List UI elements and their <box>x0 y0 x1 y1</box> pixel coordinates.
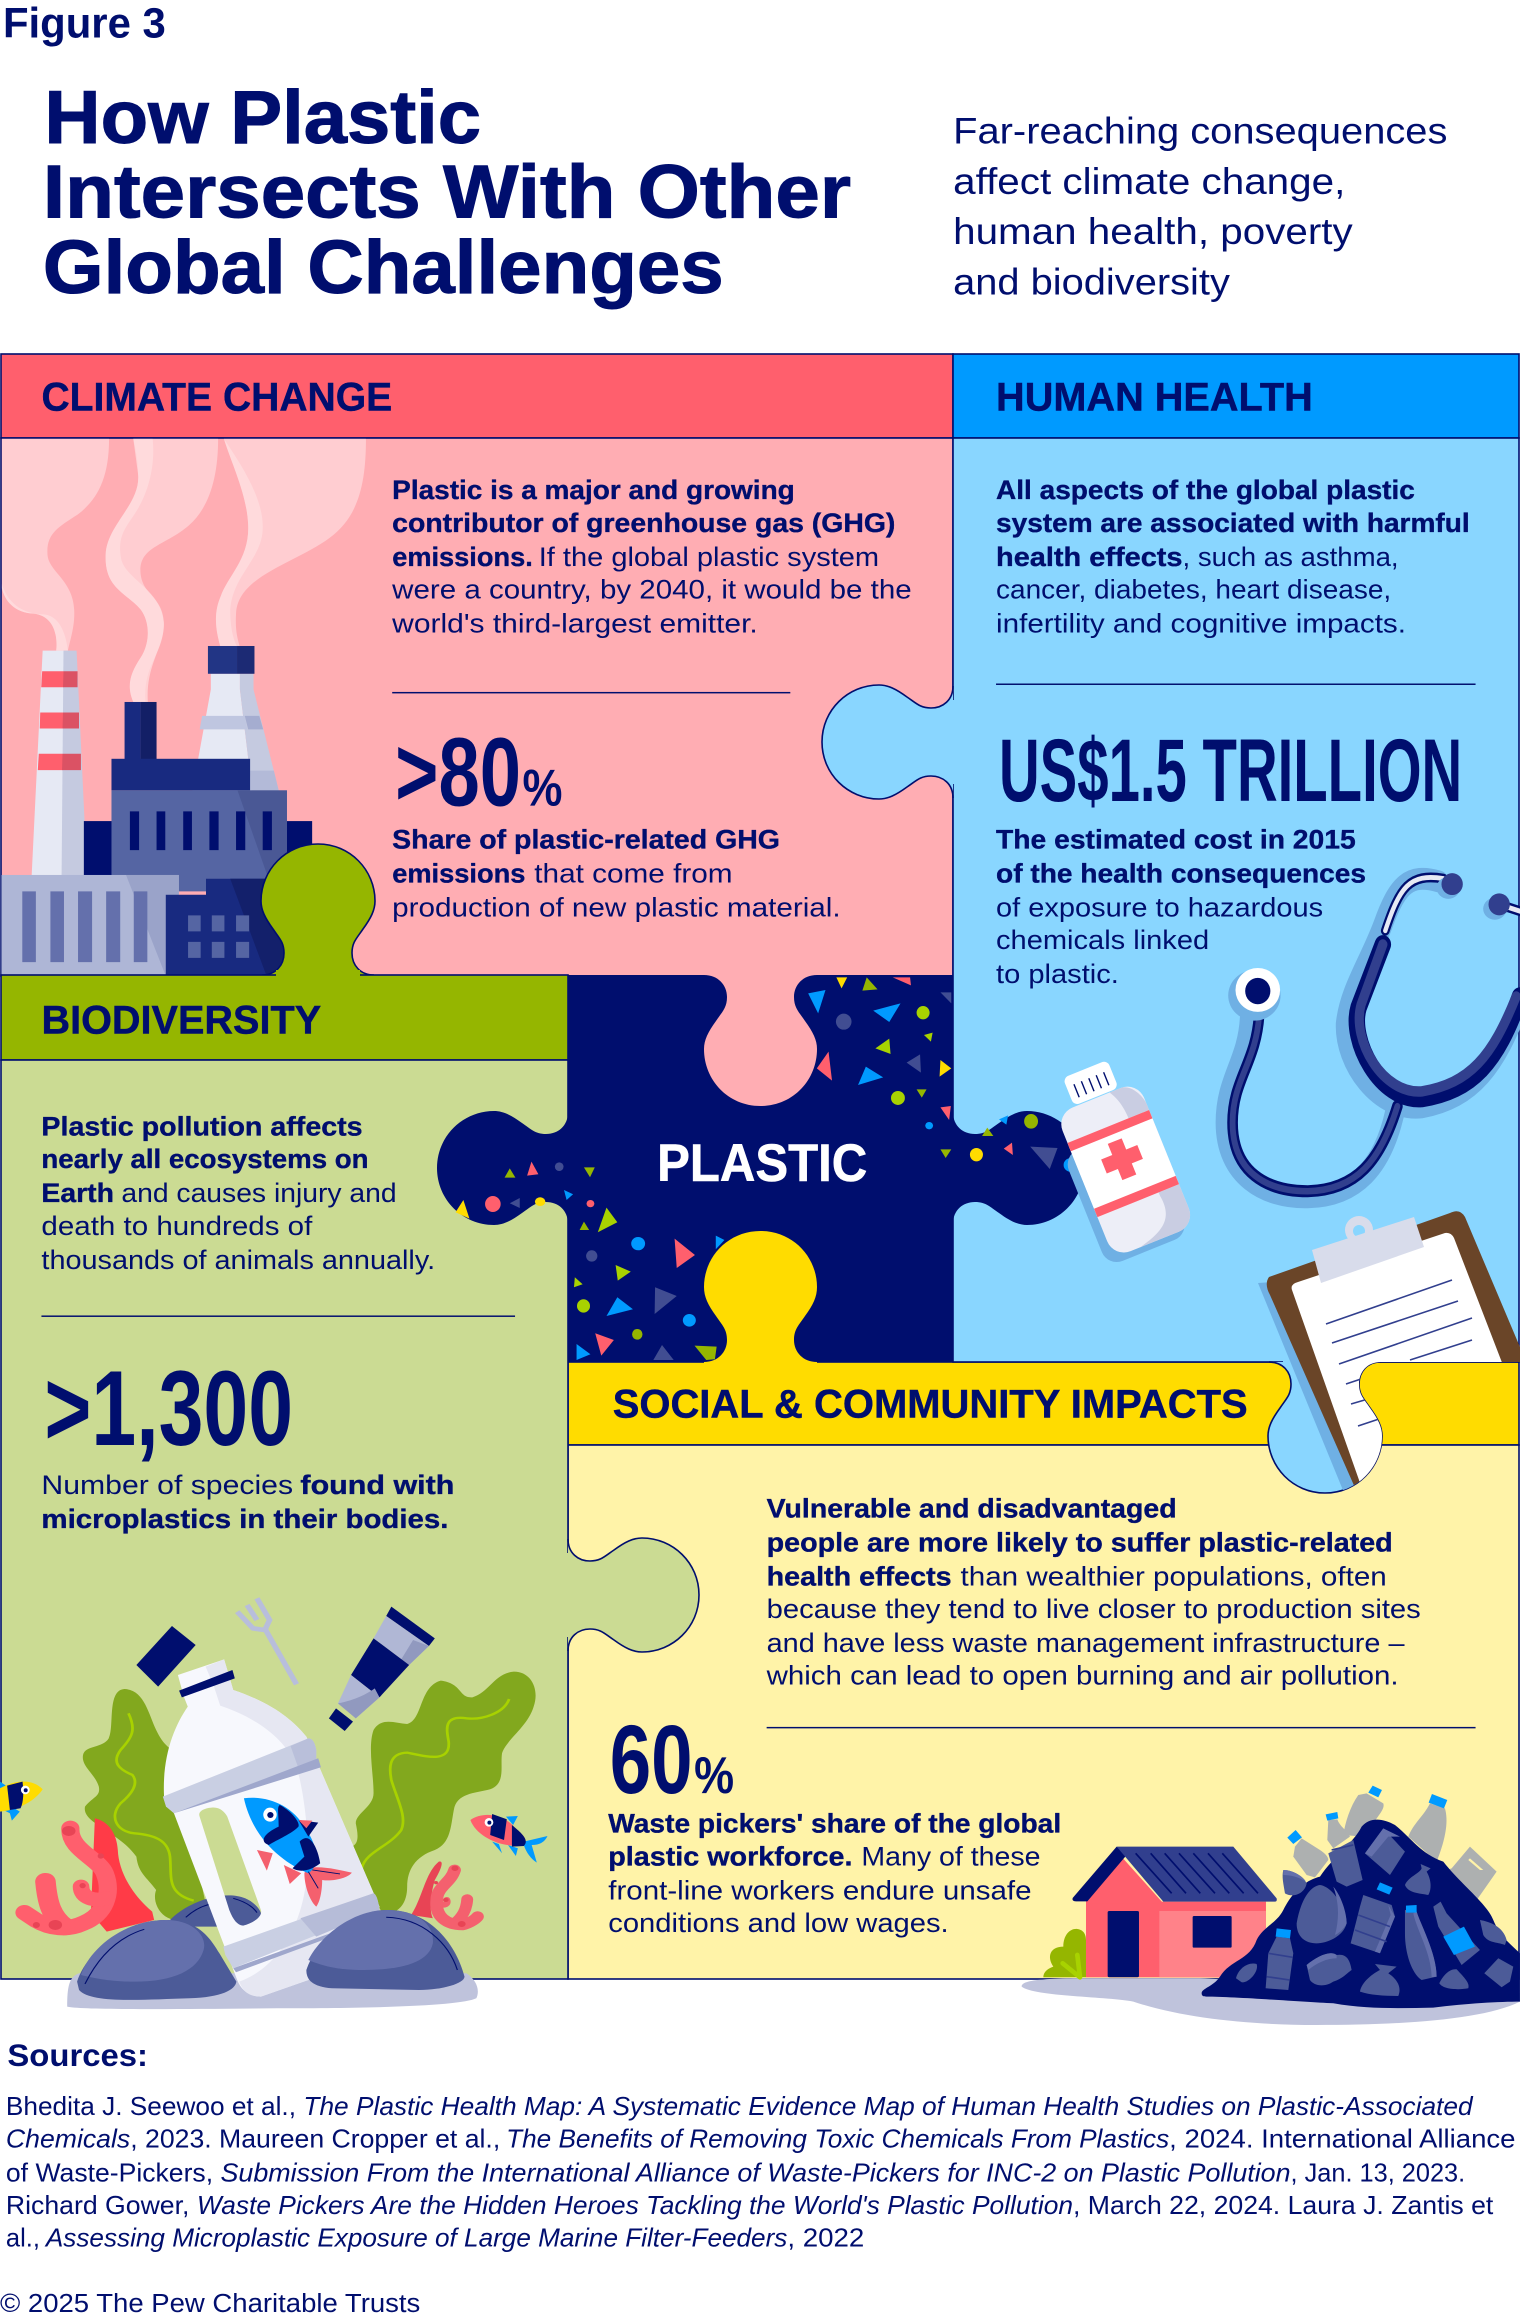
plastic bottle <box>164 1659 379 1997</box>
text: biodiversity intro: thousands of animals annually. <box>41 1244 435 1275</box>
panel: human health <box>822 354 1520 1565</box>
title: How Plastic <box>44 75 481 159</box>
text: climate intro: emissions. <box>392 541 533 572</box>
title: Global Challenges <box>43 225 724 309</box>
stat: over 80 percent <box>392 718 841 923</box>
stat: over 80 percent: >80 <box>395 718 521 827</box>
front rocks <box>77 1920 236 2000</box>
fish right <box>492 1816 547 1863</box>
title: Intersects With Other <box>43 150 851 234</box>
stat: over 80 percent: emissions <box>392 858 525 889</box>
sources: Chemicals <box>6 2125 131 2153</box>
stat: US$1.5 trillion: of the health consequences <box>996 858 1366 889</box>
stat: over 80 percent: % <box>522 759 562 817</box>
illustration: medicine bottle <box>1036 1053 1198 1267</box>
panel: climate change <box>1 354 953 976</box>
sources: Submission From the International Alliance of Waste-Pickers for INC-2 on Plastic Pollution <box>221 2160 1291 2188</box>
stat: over 1,300 species: microplastics in their bodies. <box>41 1503 448 1534</box>
stat: over 80 percent: Share of plastic-related GHG <box>392 824 780 855</box>
text: social intro: than wealthier populations, often <box>961 1561 1387 1592</box>
sources: Sources: <box>7 2038 148 2073</box>
knob: climate piece into plastic <box>704 973 817 1106</box>
gray bottles on top of the pile <box>1293 1793 1497 1906</box>
text: biodiversity intro: Plastic pollution affects <box>41 1111 363 1142</box>
stat: US$1.5 trillion: of exposure to hazardous <box>996 892 1323 923</box>
stat: 60 percent: Waste pickers' share of the global <box>608 1808 1061 1839</box>
sources: , 2023. Maureen Cropper et al., <box>130 2125 500 2153</box>
text: health intro: infertility and cognitive impacts. <box>996 607 1406 638</box>
sources: Waste Pickers Are the Hidden Heroes Tackling the World's Plastic Pollution <box>197 2192 1073 2220</box>
knob: social piece into plastic <box>704 1231 817 1364</box>
figure label: Figure 3 <box>3 0 166 47</box>
sources: , March 22, 2024. Laura J. Zantis et <box>1073 2192 1493 2220</box>
stat: 60 percent: conditions and low wages. <box>608 1907 949 1938</box>
text: social intro: and have less waste management infrastructure – <box>767 1627 1405 1658</box>
text: social intro: people are more likely to suffer plastic-related <box>767 1527 1393 1558</box>
fish in bottle <box>257 1850 301 1884</box>
sources: , 2024. International Alliance <box>1169 2125 1516 2153</box>
stat: US$1.5 trillion: The estimated cost in 2015 <box>996 824 1356 855</box>
text: biodiversity intro: and causes injury and <box>121 1177 397 1208</box>
panel: biodiversity <box>1 844 699 1979</box>
waste mound <box>1202 1820 1520 2008</box>
title <box>43 75 851 309</box>
heading: human health: HUMAN HEALTH <box>996 375 1313 419</box>
stat: 60 percent <box>608 1705 1061 1938</box>
subtitle: and biodiversity <box>953 262 1230 303</box>
fork <box>237 1598 296 1684</box>
house <box>1086 1902 1266 1977</box>
stat: US$1.5 trillion: to plastic. <box>996 958 1119 989</box>
text: biodiversity intro: death to hundreds of <box>41 1210 313 1241</box>
sources: of Waste-Pickers, <box>6 2160 213 2188</box>
sources: The Benefits of Removing Toxic Chemicals From Plastics <box>506 2125 1169 2153</box>
text: health intro: health effects <box>996 541 1183 572</box>
text: health intro: All aspects of the global plastic <box>996 474 1415 505</box>
text: social intro <box>766 1492 1476 1728</box>
subtitle: human health, poverty <box>953 211 1353 252</box>
stat: 60 percent: front-line workers endure unsafe <box>608 1874 1032 1905</box>
text: climate intro: contributor of greenhouse gas (GHG) <box>392 507 895 538</box>
text: health intro: , such as asthma, <box>1183 541 1399 572</box>
illustration: clipboard <box>1258 1211 1520 1490</box>
confetti <box>456 977 1078 1360</box>
heading: biodiversity: BIODIVERSITY <box>41 999 321 1043</box>
illustration: house beside plastic waste pile <box>1022 1786 1520 2025</box>
seaweed right <box>352 1672 536 1915</box>
puzzle piece: plastic <box>437 975 1084 1362</box>
text: climate intro: Plastic is a major and growing <box>392 474 795 505</box>
text: health intro <box>996 474 1476 685</box>
text: climate intro: were a country, by 2040, it would be the <box>391 573 912 604</box>
illustration: bottle with fish, rocks, seaweed and coral <box>0 1598 547 2009</box>
sources: Bhedita J. Seewoo et al., <box>6 2093 296 2121</box>
stat: US$1.5 trillion <box>996 721 1462 989</box>
text: health intro: cancer, diabetes, heart disease, <box>996 573 1391 604</box>
stat: 60 percent: 60 <box>610 1705 693 1814</box>
bush <box>1043 1929 1086 1977</box>
copyright: © 2025 The Pew Charitable Trusts <box>0 2288 420 2318</box>
stat: over 80 percent: that come from <box>534 858 733 889</box>
tube <box>386 1607 435 1646</box>
sources: The Plastic Health Map: A Systematic Evidence Map of Human Health Studies on Plastic-Associated <box>303 2093 1473 2121</box>
text: climate intro <box>391 474 912 693</box>
text: climate intro: world's third-largest emitter. <box>391 607 758 638</box>
text: biodiversity intro <box>41 1111 515 1317</box>
illustration: factory with smoke <box>1 439 366 976</box>
sources: al., <box>6 2225 40 2253</box>
stat: 60 percent: Many of these <box>861 1840 1040 1871</box>
stat: over 1,300 species <box>41 1349 454 1534</box>
sources <box>6 2038 1516 2253</box>
text: social intro: because they tend to live closer to production sites <box>767 1593 1421 1624</box>
text: climate intro: If the global plastic system <box>539 541 879 572</box>
coral left <box>91 1818 154 1932</box>
stat: US$1.5 trillion: chemicals linked <box>996 924 1209 955</box>
stat: over 1,300 species: >1,300 <box>44 1349 293 1468</box>
sources: , Jan. 13, 2023. <box>1291 2160 1465 2188</box>
stat: 60 percent: % <box>694 1746 734 1804</box>
subtitle: affect climate change, <box>953 161 1345 202</box>
text: biodiversity intro: Earth <box>41 1177 114 1208</box>
panel: social and community impacts <box>568 1362 1519 1979</box>
heading: plastic: PLASTIC <box>657 1134 867 1193</box>
illustration: stethoscope <box>1225 873 1520 1197</box>
back rock <box>170 1895 261 1927</box>
subtitle: Far-reaching consequences <box>953 111 1447 152</box>
heading: climate change: CLIMATE CHANGE <box>41 375 392 419</box>
text: health intro: system are associated with harmful <box>996 507 1470 538</box>
text: biodiversity intro: nearly all ecosystems on <box>41 1143 369 1174</box>
stat: over 1,300 species: Number of species <box>41 1469 293 1500</box>
heading: social and community impacts: SOCIAL & COMMUNITY IMPACTS <box>613 1382 1248 1426</box>
text: social intro: health effects <box>767 1561 952 1592</box>
sources: , 2022 <box>787 2225 864 2253</box>
sources: Assessing Microplastic Exposure of Large Marine Filter-Feeders <box>44 2225 788 2253</box>
text: social intro: which can lead to open burning and air pollution. <box>766 1660 1399 1691</box>
seaweed left <box>83 1689 206 1920</box>
coral right <box>411 1861 442 1918</box>
stat: 60 percent: plastic workforce. <box>608 1840 852 1871</box>
subtitle <box>953 111 1447 303</box>
sources: Richard Gower, <box>6 2192 189 2220</box>
stat: over 1,300 species: found with <box>300 1469 454 1500</box>
bottle cap <box>136 1626 196 1687</box>
stat: over 80 percent: production of new plastic material. <box>392 892 841 923</box>
text: social intro: Vulnerable and disadvantaged <box>767 1492 1177 1523</box>
fish left <box>0 1782 20 1821</box>
